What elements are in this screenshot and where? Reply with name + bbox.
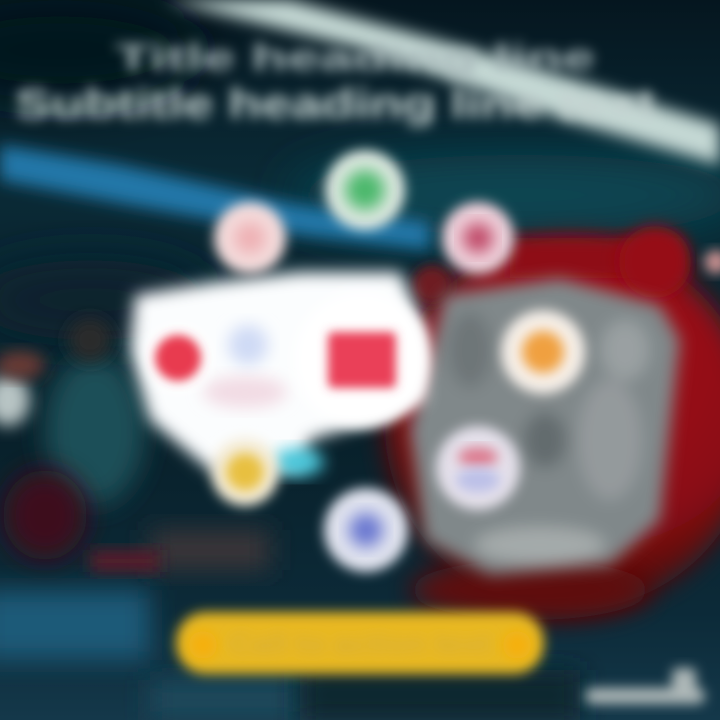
- yellow call to action pill: Call to action text: [230, 628, 490, 659]
- blue light streak: [0, 145, 430, 250]
- grey panel: [410, 278, 680, 575]
- white central panel: [130, 272, 425, 470]
- icon: pink circle right: [442, 202, 514, 274]
- white light streak: [165, 0, 720, 165]
- icon: blue circle: [324, 488, 408, 572]
- cyan glow under panel: [272, 448, 324, 476]
- icon: orange circle: [501, 310, 585, 394]
- person silhouette: [0, 318, 270, 572]
- red sphere: [385, 226, 720, 620]
- title: Subtitle heading line text: [15, 80, 655, 127]
- title: [15, 37, 655, 127]
- icon: pink circle left: [214, 202, 286, 274]
- icon: light blue circle: [228, 325, 268, 365]
- icon: green circle: [325, 150, 405, 230]
- icon: large red square: [294, 292, 430, 428]
- yellow call to action pill: [176, 612, 544, 674]
- logo bottom right: [585, 668, 705, 704]
- icon: pink blue circle: [436, 426, 520, 510]
- title: Title heading line: [115, 37, 595, 78]
- light pink band: [203, 376, 287, 408]
- icon: yellow circle: [211, 438, 279, 506]
- icon: red circle: [146, 326, 210, 390]
